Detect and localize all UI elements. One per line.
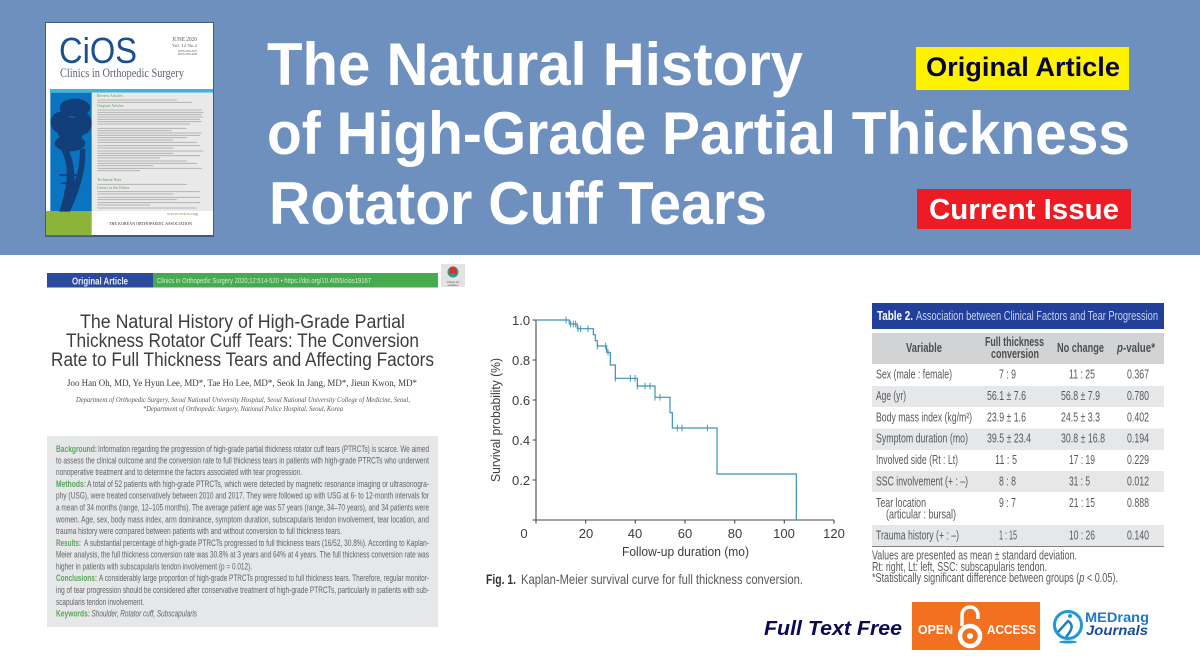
row: age: 56.1 ± 7.6 [987,388,1026,403]
badge: current issue [917,189,1131,229]
row: tear location [876,495,1149,522]
survival curve [536,317,796,520]
row: sex: 0.367 [1127,366,1149,382]
main title: The Natural History [267,31,804,98]
row: involved side: 0.229 [1127,452,1149,467]
abstract box: a mean of 34 months (range, 12–105 months). The average patient age was 57 years (range, 34–70 years), and 34 patients were [56,503,429,513]
icon: check for updates: updates [448,283,459,287]
cover issue date [172,37,198,56]
panel: table 2 [872,303,1164,585]
y axis tick labels: 0.2 [512,473,530,488]
row: SSC involvement: 8 : 8 [999,474,1016,488]
abstract box: Methods: [56,479,86,489]
row: trauma history: 0.140 [1127,528,1149,542]
x axis tick labels: 60 [678,526,692,541]
table header row: Full thickness [985,334,1044,349]
MEDrang Journals logo [1054,609,1149,644]
panel: Kaplan-Meier chart [486,313,845,587]
abstract box: Keywords: [56,609,90,619]
abstract box: A substantial percentage of high-grade PTRCTs progressed to full thickness tears (16/52, 30.8%). According to Kaplan- [84,538,429,548]
journal cover [45,22,214,237]
cover section headings [97,93,130,190]
icon: check for updates [441,264,465,287]
row: tear location: Tear location [876,495,926,510]
table header row [872,333,1164,364]
icon: check for updates: Check for [447,280,459,284]
abstract box: scapularis tendon involvement. [56,597,144,607]
censor marks [566,317,707,431]
row: sex [876,366,1149,382]
row: symptom duration: Symptom duration (mo) [876,430,968,446]
row: sex: 11 : 25 [1069,366,1095,382]
table header row: Variable [906,340,942,355]
table footnotes: *Statistically significant difference between groups (p < 0.05). [872,570,1118,585]
row: symptom duration: 30.8 ± 16.8 [1061,430,1105,446]
badge: original article: Original Article [926,52,1120,82]
cover website: www.ecios.org [167,211,199,216]
panel: article first page [47,264,465,627]
x axis tick labels [520,526,845,541]
y axis tick labels: 1.0 [512,313,530,328]
banner: header panel [0,0,1200,255]
open access badge [912,602,1040,650]
article affiliations: Department of Orthopedic Surgery, Seoul National University Hospital, Seoul National University College of Medicine, Seoul, [75,396,410,404]
cover art and contents [46,89,213,235]
row: trauma history: 1 : 15 [999,528,1017,542]
figure caption: Fig. 1. [486,571,516,587]
x axis title: Follow-up duration (mo) [622,544,749,559]
table footnotes: Rt: right, Lt: left, SSC: subscapularis tendon. [872,559,1047,574]
article header bar [47,273,438,288]
y axis tick labels [512,313,530,488]
full text free label: Full Text Free [764,618,902,640]
icon: MEDrang emblem [1054,612,1082,644]
row: tear location: 9 : 7 [999,495,1016,510]
MEDrang Journals logo: Journals [1086,622,1148,638]
x axis tick labels: 100 [773,526,795,541]
x axis tick labels: 0 [520,526,528,541]
abstract box: A considerably large proportion of high-grade PTRCTs progressed to full thickness tears. Therefore, regular monitor- [99,573,429,583]
row: involved side: 11 : 5 [995,452,1017,467]
row: body mass index: 24.5 ± 3.3 [1061,410,1100,424]
x axis tick labels: 20 [579,526,593,541]
row: tear location: 21 : 15 [1069,495,1095,510]
row: age: Age (yr) [876,388,906,403]
abstract box: Background: [56,444,97,454]
table footnotes: Values are presented as mean ± standard deviation. [872,548,1077,562]
abstract box: ing of tear progression should be considered after conservative treatment of high-grade PTRCTs, particularly in patients with sub- [56,585,429,595]
cover section headings: Technical Note [97,177,121,182]
y axis tick labels: 0.4 [512,433,530,448]
open access badge: ACCESS [987,623,1036,637]
table header row: No change [1057,340,1104,355]
article title: The Natural History of High-Grade Partial [80,312,405,333]
figure caption: Kaplan-Meier survival curve for full thickness conversion. [521,571,803,587]
row: sex: Sex (male : female) [876,366,952,382]
abstract box: trauma history were compared between patients with and without conversion to full thickness tears. [56,526,342,536]
row: trauma history: 10 : 26 [1069,528,1095,542]
row: sex: 7 : 9 [999,366,1016,382]
abstract box: Shoulder, Rotator cuff, Subscapularis [92,609,197,619]
cover section headings: Letters to the Editor [97,185,130,190]
row: age: 56.8 ± 7.9 [1061,388,1100,403]
row: symptom duration [876,430,1149,446]
cover issue date: pISSN 2005-291X [178,50,197,53]
article title: Thickness Rotator Cuff Tears: The Conversion [66,331,419,352]
x axis tick labels: 80 [728,526,742,541]
table header row: p-value* [1116,340,1156,355]
row: tear location: 0.888 [1127,495,1149,510]
chart axes [532,320,834,524]
article affiliations [75,396,410,413]
row: age [876,388,1149,403]
row: body mass index: 23.9 ± 1.6 [987,410,1026,424]
abstract box: Results: [56,538,81,548]
cover issue date: eISSN 2005-4408 [178,53,198,56]
x axis tick labels: 120 [823,526,845,541]
main title: of High-Grade Partial Thickness [267,100,1130,167]
table footnotes [872,548,1118,585]
article header bar: Clinics in Orthopedic Surgery 2020;12:514-520 • https://doi.org/10.4055/cios19167 [157,278,371,285]
row: body mass index: 0.402 [1127,410,1149,424]
table title bar [872,303,1164,329]
row: SSC involvement: 0.012 [1127,474,1149,488]
row: symptom duration: 0.194 [1127,430,1149,446]
cover section headings: Original Articles [97,103,124,108]
row: involved side [876,452,1149,467]
cover masthead: CiOS [59,30,137,71]
cover issue date: Vol. 12 No.2 [172,43,198,48]
table striped rows [872,386,1164,546]
abstract box: to assess the clinical outcome and the conversion rate to full thickness tears in patients with high-grade PTRCTs who underwent [56,456,429,466]
abstract box: Meier analysis, the full thickness conversion rate was 30.8% at 3 years and 64% at 4 years. The full thickness conversion rate was [56,550,429,560]
abstract box: Information regarding the progression of high-grade partial thickness rotator cuff tears (PTRCTs) is scarce. We aimed [98,444,429,454]
row: symptom duration: 39.5 ± 23.4 [987,430,1031,446]
MEDrang Journals logo: MEDrang [1085,609,1149,625]
cover subtitle: Clinics in Orthopedic Surgery [60,66,185,80]
y axis title: Survival probability (%) [488,358,503,482]
article affiliations: *Department of Orthopedic Surgery, National Police Hospital, Seoul, Korea [143,405,343,413]
row: involved side: 17 : 19 [1069,452,1095,467]
row: trauma history: Trauma history (+ : –) [876,528,959,542]
row: body mass index: Body mass index (kg/m²) [876,410,972,424]
article authors: Joo Han Oh, MD, Ye Hyun Lee, MD*, Tae Ho Lee, MD*, Seok In Jang, MD*, Jieun Kwon, MD* [67,379,417,389]
row: trauma history [876,528,1149,542]
table title bar: Table 2. [877,308,913,323]
cover section headings: Review Articles [97,93,123,98]
table header row: conversion [991,346,1039,361]
icon: open padlock [960,607,980,646]
row: SSC involvement [876,474,1149,488]
abstract box: higher in patients with subscapularis tendon involvement (p = 0.012). [56,561,252,571]
main title [267,31,1130,237]
row: body mass index [876,410,1149,424]
open access badge: OPEN [918,623,953,637]
abstract box: women. Age, sex, body mass index, arm dominance, symptom duration, subscapularis tendon involvement, tear location, and [55,514,429,524]
cover publisher: THE KOREAN ORTHOPAEDIC ASSOCIATION [109,221,193,226]
abstract box: Conclusions: [56,573,97,583]
row: tear location: (articular : bursal) [886,506,956,522]
article title [51,312,434,371]
badge: original article [916,47,1129,90]
abstract box: nonoperative treatment and to determine the factors associated with tear progression. [56,467,302,477]
main title: Rotator Cuff Tears [269,170,767,237]
y axis tick labels: 0.6 [512,393,530,408]
row: SSC involvement: 31 : 5 [1069,474,1090,488]
row: SSC involvement: SSC involvement (+ : –) [876,474,968,488]
badge: current issue: Current Issue [929,194,1119,226]
abstract box: A total of 52 patients with high-grade PTRCTs, which were detected by magnetic resonance imaging or ultrasonogra- [87,479,429,489]
y axis tick labels: 0.8 [512,353,530,368]
abstract box: phy (USG), were treated conservatively between 2010 and 2017. They were followed up with USG at 6- to 12-month intervals for [56,491,429,501]
article title: Rate to Full Thickness Tears and Affecting Factors [51,350,434,371]
abstract box [47,436,438,627]
article header bar: Original Article [72,276,128,288]
x axis tick labels: 40 [628,526,642,541]
cover issue date: JUNE 2020 [172,37,197,43]
row: age: 0.780 [1127,388,1149,403]
row: involved side: Involved side (Rt : Lt) [876,452,958,467]
